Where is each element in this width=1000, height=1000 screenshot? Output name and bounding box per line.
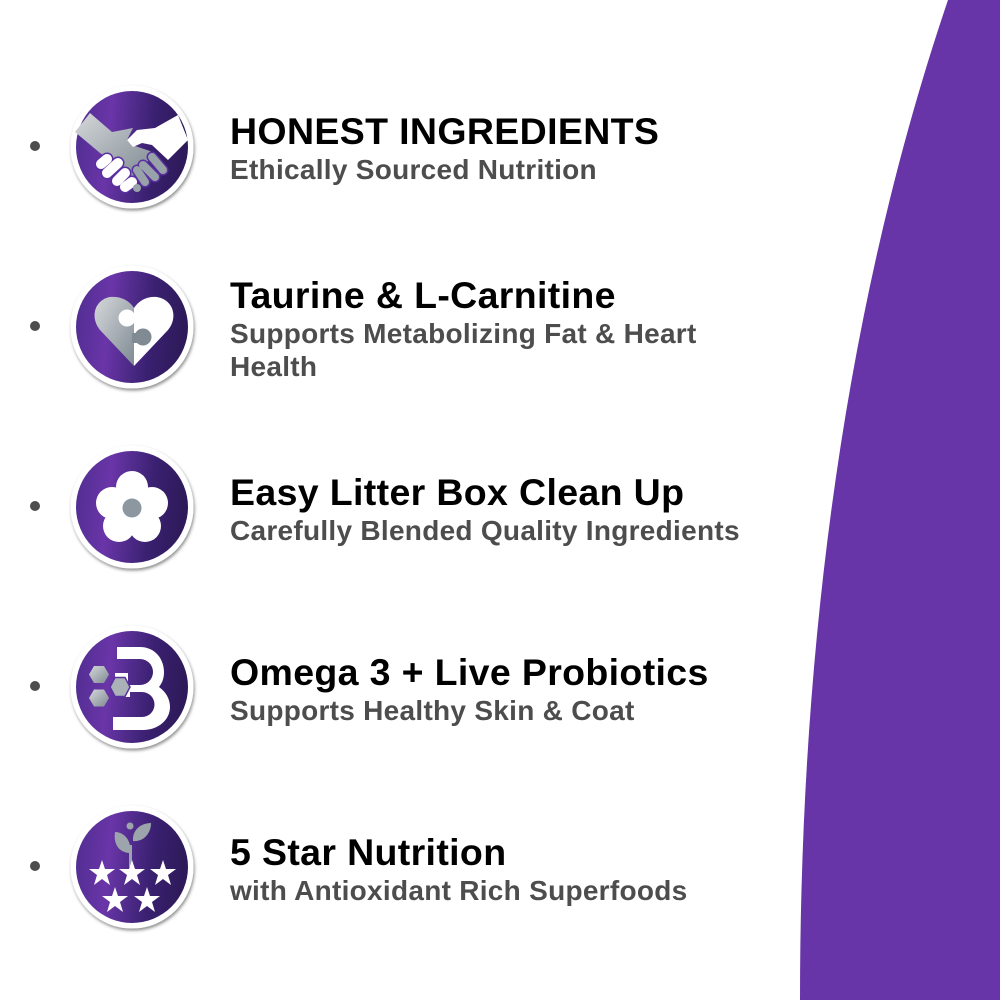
icon: puzzle heart <box>70 266 194 388</box>
text: honest ingredients <box>230 110 659 185</box>
text: easy litter box clean up: Carefully Blended Quality Ingredients <box>230 515 740 546</box>
text: omega 3 and live probiotics <box>230 651 709 726</box>
text: 5 star nutrition: 5 Star Nutrition <box>230 831 506 873</box>
purple curved side panel <box>800 0 1000 1000</box>
bullet 2 <box>30 321 40 331</box>
bullet 1 <box>30 141 40 151</box>
text: taurine and l-carnitine <box>230 274 697 382</box>
icon: handshake <box>70 86 194 208</box>
text: omega 3 and live probiotics: Omega 3 + Live Probiotics <box>230 651 709 693</box>
text: 5 star nutrition <box>230 831 687 906</box>
icon: omega 3 <box>70 626 194 748</box>
text: easy litter box clean up: Easy Litter Box Clean Up <box>230 471 684 513</box>
icon: five stars and sprout <box>70 806 194 928</box>
text: 5 star nutrition: with Antioxidant Rich Superfoods <box>230 875 687 906</box>
bullet 5 <box>30 861 40 871</box>
text: honest ingredients: HONEST INGREDIENTS <box>230 110 659 152</box>
bullet 3 <box>30 501 40 511</box>
text: omega 3 and live probiotics: Supports Healthy Skin & Coat <box>230 695 635 726</box>
text: honest ingredients: Ethically Sourced Nutrition <box>230 154 597 185</box>
text: taurine and l-carnitine: Taurine & L-Carnitine <box>230 274 616 316</box>
icon: flower <box>70 446 194 568</box>
bullet 4 <box>30 681 40 691</box>
text: taurine and l-carnitine: Supports Metabolizing Fat & Heart Health <box>230 318 697 382</box>
text: easy litter box clean up <box>230 471 740 546</box>
